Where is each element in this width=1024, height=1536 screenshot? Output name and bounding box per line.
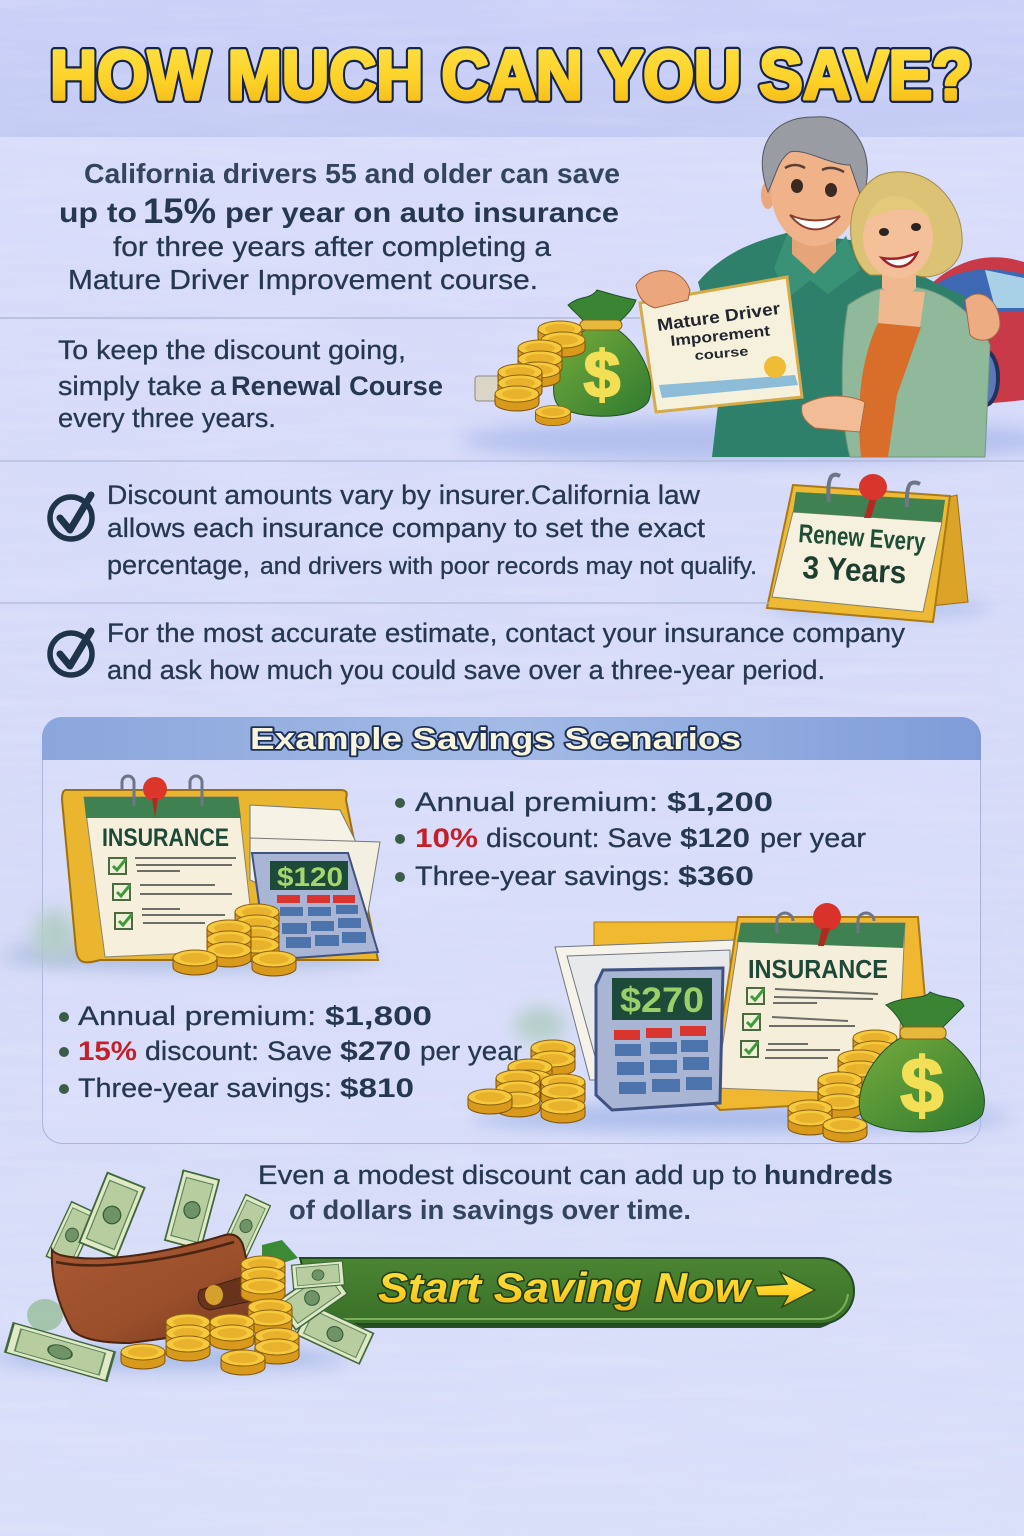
car — [930, 257, 1024, 404]
intro text block: up to — [59, 197, 137, 228]
discount note: and drivers with poor records may not qualify. — [260, 553, 757, 580]
panel header — [42, 717, 981, 760]
scenario 1 text: $120 — [680, 823, 750, 853]
button: start saving now: Start Saving Now — [378, 1264, 752, 1311]
scenario 1 text: $360 — [678, 861, 754, 891]
illustration: insurance calendar with $270 calculator and money bag: INSURANCE — [748, 954, 888, 984]
scenario 2 text: 15% — [78, 1036, 137, 1066]
hands — [636, 271, 690, 308]
illustration: couple with certificate, money bag and car: Imporement — [670, 323, 771, 350]
discount note: Discount amounts vary by insurer.California law — [107, 480, 701, 510]
intro text block: for three years after completing a — [113, 231, 551, 262]
scenario 1 text — [395, 787, 866, 891]
scenario 2 text: $270 — [340, 1036, 411, 1066]
intro text block: California drivers 55 and older can save — [84, 158, 620, 189]
scenario 1 text: discount: Save — [486, 823, 672, 853]
title: HOW MUCH CAN YOU SAVE? — [50, 36, 972, 114]
renewal text block: To keep the discount going, — [58, 335, 406, 365]
calendar: renew every 3 years: Renew Every — [798, 518, 927, 557]
illustration: insurance calendar with $120 calculator: $120 — [277, 862, 343, 892]
discount note: percentage, — [107, 550, 250, 580]
title: HOW MUCH CAN YOU SAVE? — [50, 36, 972, 114]
coins and silver stack — [475, 376, 515, 401]
scenario 1 text: $1,200 — [667, 787, 773, 817]
renewal text block: simply take a — [58, 371, 227, 401]
illustration: insurance calendar with $270 calculator and money bag: $270 — [620, 981, 704, 1020]
illustration: insurance calendar with $270 calculator and money bag: $ — [900, 1041, 944, 1129]
illustration: insurance calendar with $120 calculator: INSURANCE — [102, 824, 229, 852]
scenario 2 text: per year — [420, 1036, 522, 1066]
scenario 1 text: 10% — [415, 823, 478, 853]
scenario 1 text: Three-year savings: — [415, 861, 670, 891]
illustration: couple with certificate, money bag and car: $ — [584, 337, 620, 411]
man hand on shoulder — [965, 294, 1000, 340]
scenario 2 text: Three-year savings: — [78, 1073, 332, 1103]
intro text block — [59, 158, 620, 295]
scenario 2 text: Annual premium: — [78, 1001, 316, 1031]
money bag — [554, 330, 651, 416]
certificate — [640, 277, 802, 412]
closing text: Even a modest discount can add up to — [258, 1160, 757, 1190]
renewal text block: every three years. — [58, 403, 276, 433]
icon: check 1 — [50, 495, 92, 539]
contact note — [107, 618, 906, 685]
panel: example savings scenarios — [0, 717, 1010, 1144]
panel heading: Example Savings Scenarios — [250, 721, 741, 756]
illustration: couple with certificate, money bag and car: course — [694, 343, 749, 363]
illustration: insurance calendar with $270 calculator and money bag — [468, 903, 1010, 1142]
intro text block: 15% — [143, 192, 216, 231]
arrow — [755, 1272, 815, 1307]
calendar: renew every 3 years — [767, 474, 992, 622]
closing text — [258, 1160, 893, 1225]
illustration: couple with certificate, money bag and car: Mature Driver — [656, 299, 782, 335]
scenario 1 text: per year — [760, 823, 866, 853]
woman — [842, 287, 990, 457]
contact note: and ask how much you could save over a three-year period. — [107, 655, 825, 685]
illustration: couple with certificate, money bag and car — [460, 117, 1024, 462]
renewal text block: Renewal Course — [231, 371, 443, 401]
renewal text block — [58, 335, 443, 433]
scenario 2 text: $810 — [340, 1073, 414, 1103]
scenario 2 text: discount: Save — [145, 1036, 332, 1066]
icon: check 2 — [50, 631, 92, 675]
scenario 2 text — [59, 1001, 522, 1103]
discount note: allows each insurance company to set the exact — [107, 513, 706, 543]
scenario 1 text: Annual premium: — [415, 787, 658, 817]
intro text block: per year on auto insurance — [225, 197, 619, 228]
discount note — [107, 480, 757, 580]
calendar: renew every 3 years: 3 Years — [802, 549, 907, 590]
scenario 2 text: $1,800 — [325, 1001, 432, 1031]
man body — [698, 232, 965, 457]
intro text block: Mature Driver Improvement course. — [68, 264, 538, 295]
closing text: of dollars in savings over time. — [289, 1195, 691, 1225]
closing text: hundreds — [764, 1160, 893, 1190]
illustration: wallet with cash and coins — [0, 1170, 373, 1381]
man head — [792, 222, 836, 274]
illustration: insurance calendar with $120 calculator — [0, 776, 380, 976]
button: start saving now — [300, 1258, 854, 1328]
contact note: For the most accurate estimate, contact your insurance company — [107, 618, 906, 648]
